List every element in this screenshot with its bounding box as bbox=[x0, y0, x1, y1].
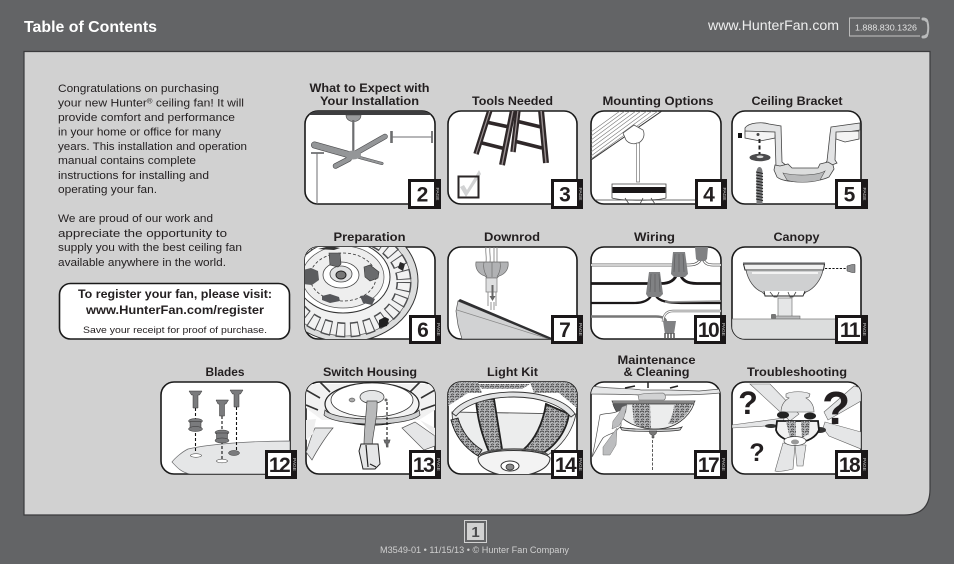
panel: downrod bbox=[448, 230, 583, 344]
panel: what to expect bbox=[305, 81, 441, 209]
title: Table of Contents bbox=[24, 19, 157, 36]
panel: canopy bbox=[732, 230, 868, 344]
page number badge: 12 bbox=[269, 454, 290, 477]
card bbox=[305, 111, 435, 204]
illustration: cleaning light kit with cloth bbox=[591, 382, 720, 470]
panel: blades bbox=[161, 365, 297, 479]
illustration: hanger ball and canopy bbox=[456, 247, 552, 340]
panel: light kit bbox=[448, 365, 583, 479]
page number badge: 3 bbox=[559, 184, 571, 206]
question mark: lower left: ? bbox=[749, 439, 765, 467]
card bbox=[732, 247, 861, 339]
introduction text: instructions for installing and bbox=[58, 170, 209, 182]
question mark: large right: ? bbox=[822, 382, 850, 434]
page number badge: PAGE bbox=[435, 323, 441, 336]
introduction text: supply you with the best ceiling fan bbox=[58, 242, 242, 254]
main light panel bbox=[24, 52, 930, 515]
card bbox=[591, 247, 721, 339]
heading: Tools Needed bbox=[472, 94, 553, 108]
panel: maintenance and cleaning bbox=[591, 353, 727, 479]
page number 1 bbox=[464, 520, 486, 542]
illustration: ceiling fan with clearances bbox=[305, 111, 435, 204]
introduction text: ceiling fan! It will bbox=[152, 98, 244, 110]
heading bbox=[310, 81, 430, 108]
page number badge: PAGE bbox=[434, 188, 440, 200]
heading: What to Expect with bbox=[310, 81, 430, 95]
heading: Your Installation bbox=[320, 94, 419, 108]
illustration: fan with question marks bbox=[732, 382, 861, 471]
page number badge: 17 bbox=[698, 454, 719, 477]
heading: Preparation bbox=[334, 230, 406, 244]
illustration: sloped ceiling mount bbox=[591, 111, 695, 204]
card bbox=[448, 382, 577, 474]
page number badge bbox=[835, 450, 868, 479]
panel: switch housing bbox=[306, 365, 441, 479]
panel: ceiling bracket bbox=[732, 94, 868, 209]
page number badge: 13 bbox=[413, 454, 434, 477]
heading: Ceiling Bracket bbox=[752, 94, 842, 108]
page number badge: 10 bbox=[698, 319, 719, 342]
page number badge bbox=[408, 179, 441, 209]
page number badge bbox=[409, 450, 441, 479]
card bbox=[306, 382, 435, 474]
introduction text: years. This installation and operation bbox=[58, 141, 247, 153]
introduction text: operating your fan. bbox=[58, 184, 157, 196]
card bbox=[448, 247, 577, 339]
page number badge bbox=[694, 450, 727, 479]
callout: register your fan bbox=[60, 284, 290, 339]
introduction text: your new Hunter bbox=[58, 98, 140, 110]
page number badge: 4 bbox=[703, 184, 715, 206]
page number badge bbox=[551, 315, 583, 344]
illustration: step ladder and checkbox bbox=[458, 110, 546, 198]
page number badge: 7 bbox=[559, 319, 571, 342]
page number badge: 18 bbox=[839, 454, 861, 477]
introduction text: in your home or office for many bbox=[58, 126, 221, 138]
heading: Troubleshooting bbox=[747, 365, 847, 379]
introduction text bbox=[58, 83, 247, 269]
introduction text: available anywhere in the world. bbox=[58, 257, 226, 269]
callout: register your fan: To register your fan, please visit: bbox=[78, 287, 272, 301]
page number badge: PAGE bbox=[577, 458, 583, 471]
illustration: bracket, washer and screw bbox=[738, 123, 860, 204]
page number badge: PAGE bbox=[577, 323, 583, 336]
card bbox=[732, 111, 861, 204]
illustration: decorative light bowl bbox=[448, 382, 577, 476]
heading: Maintenance bbox=[618, 353, 696, 367]
card bbox=[591, 111, 721, 204]
card bbox=[448, 111, 577, 204]
page number badge: PAGE bbox=[435, 458, 441, 471]
heading: Light Kit bbox=[487, 365, 538, 379]
callout: register your fan: Save your receipt for proof of purchase. bbox=[83, 324, 267, 335]
illustration: blade screws and gaskets bbox=[172, 390, 290, 474]
page number badge: PAGE bbox=[720, 458, 726, 471]
page number badge: 5 bbox=[844, 184, 856, 206]
heading: & Cleaning bbox=[624, 365, 690, 379]
introduction text: ® bbox=[147, 98, 153, 106]
page number badge bbox=[551, 179, 583, 209]
page number badge: 14 bbox=[555, 454, 577, 477]
introduction text: appreciate the opportunity to bbox=[58, 228, 227, 240]
page number badge bbox=[835, 179, 868, 209]
card bbox=[732, 382, 861, 474]
page number badge: PAGE bbox=[861, 458, 867, 471]
page number badge bbox=[695, 179, 727, 209]
heading: Wiring bbox=[634, 230, 675, 244]
page number badge: PAGE bbox=[861, 323, 867, 336]
phone number box bbox=[850, 18, 920, 36]
page number badge: PAGE bbox=[861, 188, 867, 200]
panel: mounting options bbox=[591, 94, 727, 209]
icon: telephone handset bbox=[923, 19, 928, 37]
page number badge bbox=[694, 315, 726, 344]
page number badge bbox=[551, 450, 583, 479]
heading bbox=[618, 353, 696, 379]
card bbox=[161, 382, 290, 474]
page number badge bbox=[265, 450, 297, 479]
heading: Blades bbox=[206, 365, 245, 379]
panel: tools needed bbox=[448, 94, 583, 209]
page number badge bbox=[835, 315, 868, 344]
illustration: canopy, screw and motor bbox=[732, 262, 861, 339]
illustration: wire connectors bbox=[591, 247, 721, 339]
page number badge: PAGE bbox=[721, 188, 727, 200]
heading: Switch Housing bbox=[323, 365, 417, 379]
introduction text: manual contains complete bbox=[58, 155, 196, 167]
page number 1: 1 bbox=[471, 524, 480, 541]
phone number box: 1.888.830.1326 bbox=[855, 24, 917, 32]
question mark: top left: ? bbox=[738, 385, 758, 421]
panel: preparation bbox=[304, 232, 441, 344]
heading: Downrod bbox=[484, 230, 540, 244]
callout: register your fan: www.HunterFan.com/register bbox=[85, 303, 264, 317]
card bbox=[305, 247, 435, 339]
page number badge: 11 bbox=[840, 319, 861, 342]
illustration: motor housing bbox=[305, 247, 418, 339]
card bbox=[591, 382, 720, 474]
panel: wiring bbox=[591, 230, 726, 344]
page number badge: PAGE bbox=[577, 188, 583, 200]
panel: troubleshooting bbox=[732, 365, 868, 479]
page number badge: 2 bbox=[417, 184, 428, 206]
illustration: switch housing bbox=[306, 382, 435, 469]
heading: Canopy bbox=[774, 230, 820, 244]
page number badge: PAGE bbox=[291, 458, 297, 471]
page number badge bbox=[409, 315, 441, 344]
introduction text: provide comfort and performance bbox=[58, 112, 235, 124]
page number badge: PAGE bbox=[720, 323, 726, 336]
introduction text: Congratulations on purchasing bbox=[58, 83, 219, 95]
introduction text: We are proud of our work and bbox=[58, 213, 213, 225]
page number badge: 6 bbox=[417, 319, 429, 342]
website address: www.HunterFan.com bbox=[707, 18, 839, 33]
footer text: M3549-01 • 11/15/13 • © Hunter Fan Company bbox=[380, 545, 569, 555]
heading: Mounting Options bbox=[602, 94, 714, 108]
